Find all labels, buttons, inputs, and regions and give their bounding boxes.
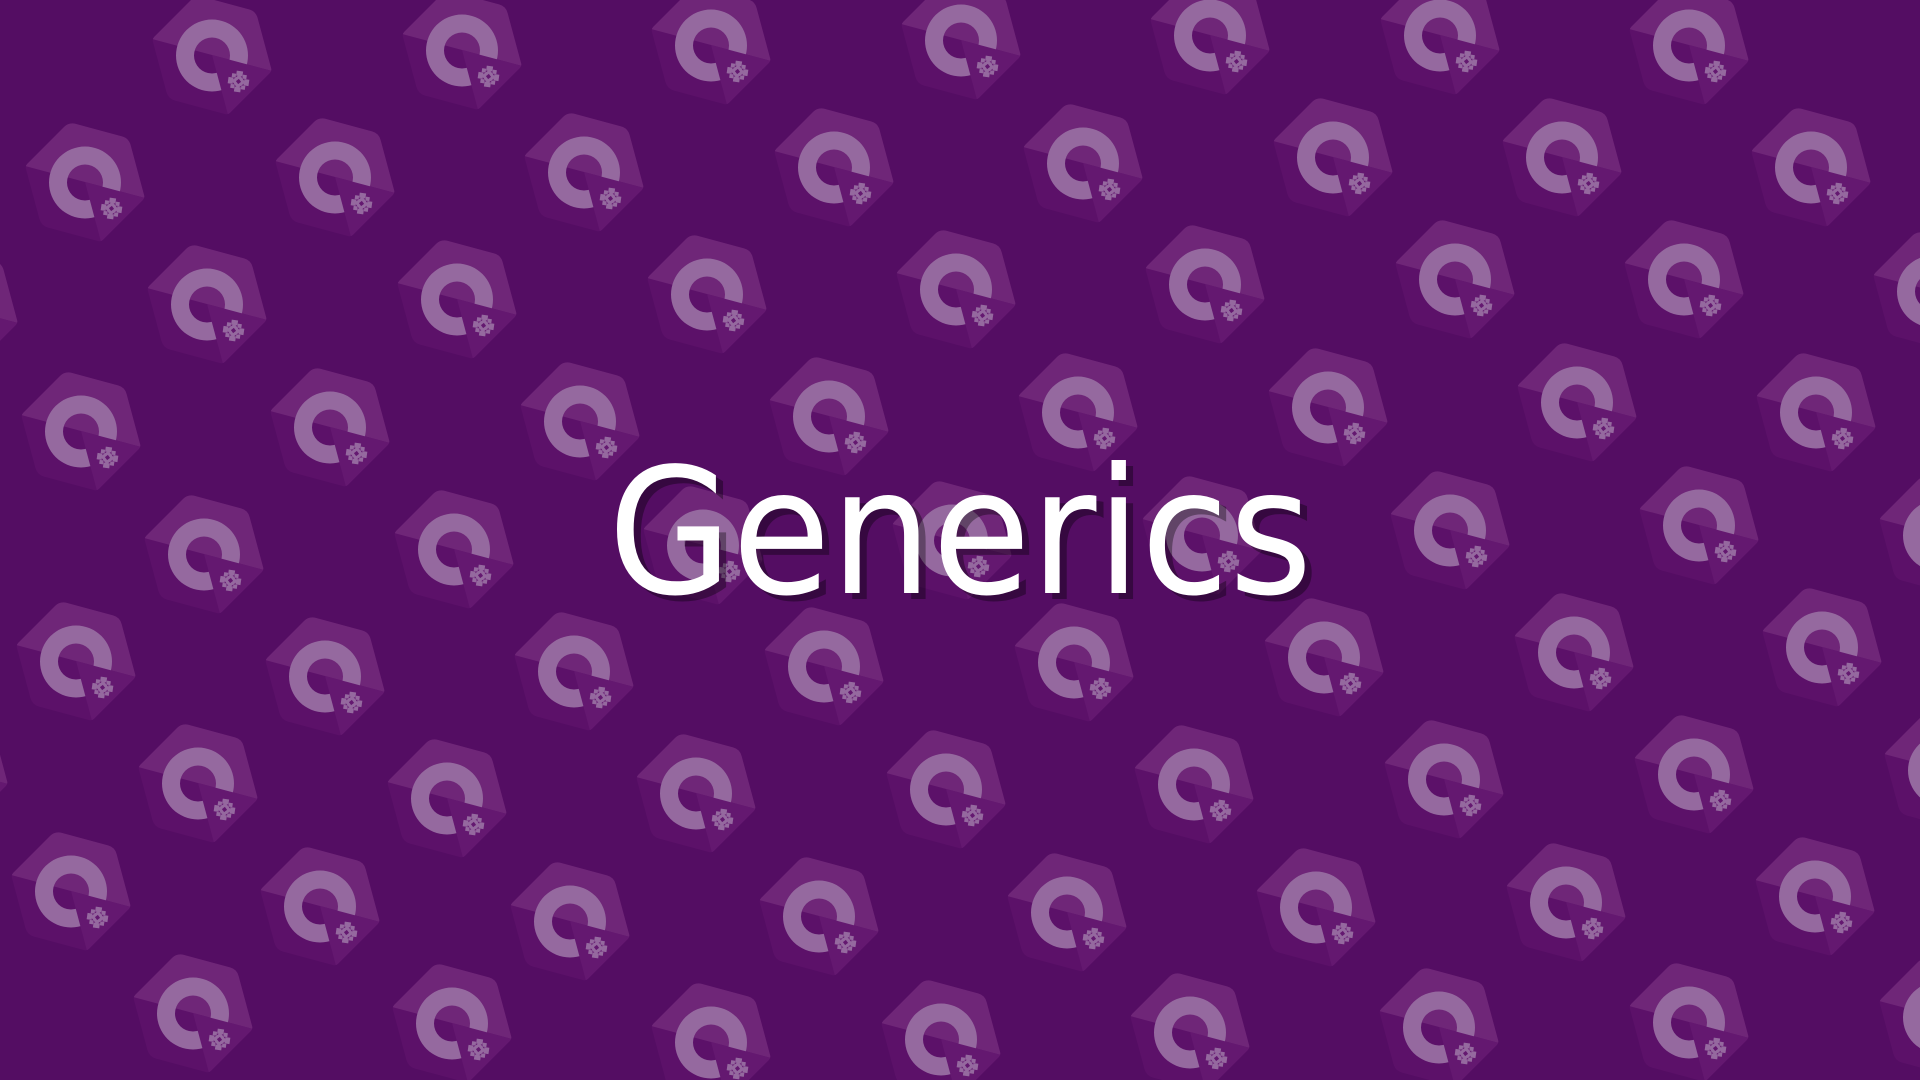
logo	[1369, 957, 1509, 1080]
logo row 7	[0, 698, 1920, 868]
logo	[1140, 0, 1280, 105]
logo	[392, 0, 532, 120]
logo	[1254, 587, 1394, 727]
logo	[1246, 837, 1386, 977]
logo	[265, 107, 405, 247]
logo	[1869, 947, 1920, 1080]
logo	[1614, 209, 1754, 349]
logo	[142, 0, 282, 125]
logo row 4	[11, 332, 1886, 501]
logo	[123, 943, 263, 1080]
logo	[1619, 0, 1759, 115]
logo row 9	[123, 943, 1920, 1080]
logo	[384, 479, 524, 619]
logo	[882, 470, 1022, 610]
logo row 1	[142, 0, 1759, 125]
logo	[514, 102, 654, 242]
logo	[1624, 704, 1764, 844]
logo	[1492, 87, 1632, 227]
logo	[510, 351, 650, 491]
logo	[1752, 577, 1892, 717]
logo	[504, 601, 644, 741]
logo	[1504, 582, 1644, 722]
logo row 6	[6, 577, 1892, 746]
logo	[1258, 337, 1398, 477]
logo row 8	[1, 821, 1885, 991]
logo	[1008, 342, 1148, 482]
logo	[1, 821, 141, 961]
logo	[626, 723, 766, 863]
logo	[1120, 962, 1260, 1080]
logo	[377, 728, 517, 868]
logo	[137, 234, 277, 374]
logo	[1745, 826, 1885, 966]
logo	[134, 484, 274, 624]
logo	[1374, 709, 1514, 849]
logo row 3	[0, 209, 1920, 377]
logo	[749, 846, 889, 986]
logo	[1135, 214, 1275, 354]
logo	[754, 596, 894, 736]
logo	[0, 237, 28, 377]
logo	[387, 229, 527, 369]
logo	[1741, 97, 1881, 237]
logo	[876, 719, 1016, 859]
logo	[1132, 465, 1272, 605]
logo	[6, 591, 146, 731]
logo	[1380, 460, 1520, 600]
logo	[250, 836, 390, 976]
logo	[1263, 87, 1403, 227]
logo	[500, 851, 640, 991]
logo	[1869, 465, 1920, 605]
logo	[637, 224, 777, 364]
logo	[0, 698, 18, 838]
logo	[1629, 455, 1769, 595]
logo	[255, 606, 395, 746]
logo	[997, 842, 1137, 982]
logo	[641, 972, 781, 1080]
logo	[1013, 93, 1153, 233]
logo row 5	[134, 455, 1920, 624]
logo	[11, 361, 151, 501]
logo	[1370, 0, 1510, 105]
logo	[886, 219, 1026, 359]
logo	[759, 346, 899, 486]
logo	[764, 97, 904, 237]
logo	[1874, 700, 1920, 840]
logo row 2	[15, 87, 1881, 252]
logo	[1507, 332, 1647, 472]
title: Generics	[608, 432, 1312, 635]
logo	[1863, 221, 1920, 361]
logo	[641, 0, 781, 115]
logo	[1746, 342, 1886, 482]
logo	[633, 475, 773, 615]
logo	[871, 969, 1011, 1080]
logo	[128, 713, 268, 853]
logo	[891, 0, 1031, 110]
logo	[1496, 832, 1636, 972]
logo	[260, 357, 400, 497]
logo	[1619, 952, 1759, 1080]
logo	[1124, 714, 1264, 854]
logo	[1385, 209, 1525, 349]
logo	[382, 953, 522, 1080]
logo	[1004, 592, 1144, 732]
logo	[15, 112, 155, 252]
